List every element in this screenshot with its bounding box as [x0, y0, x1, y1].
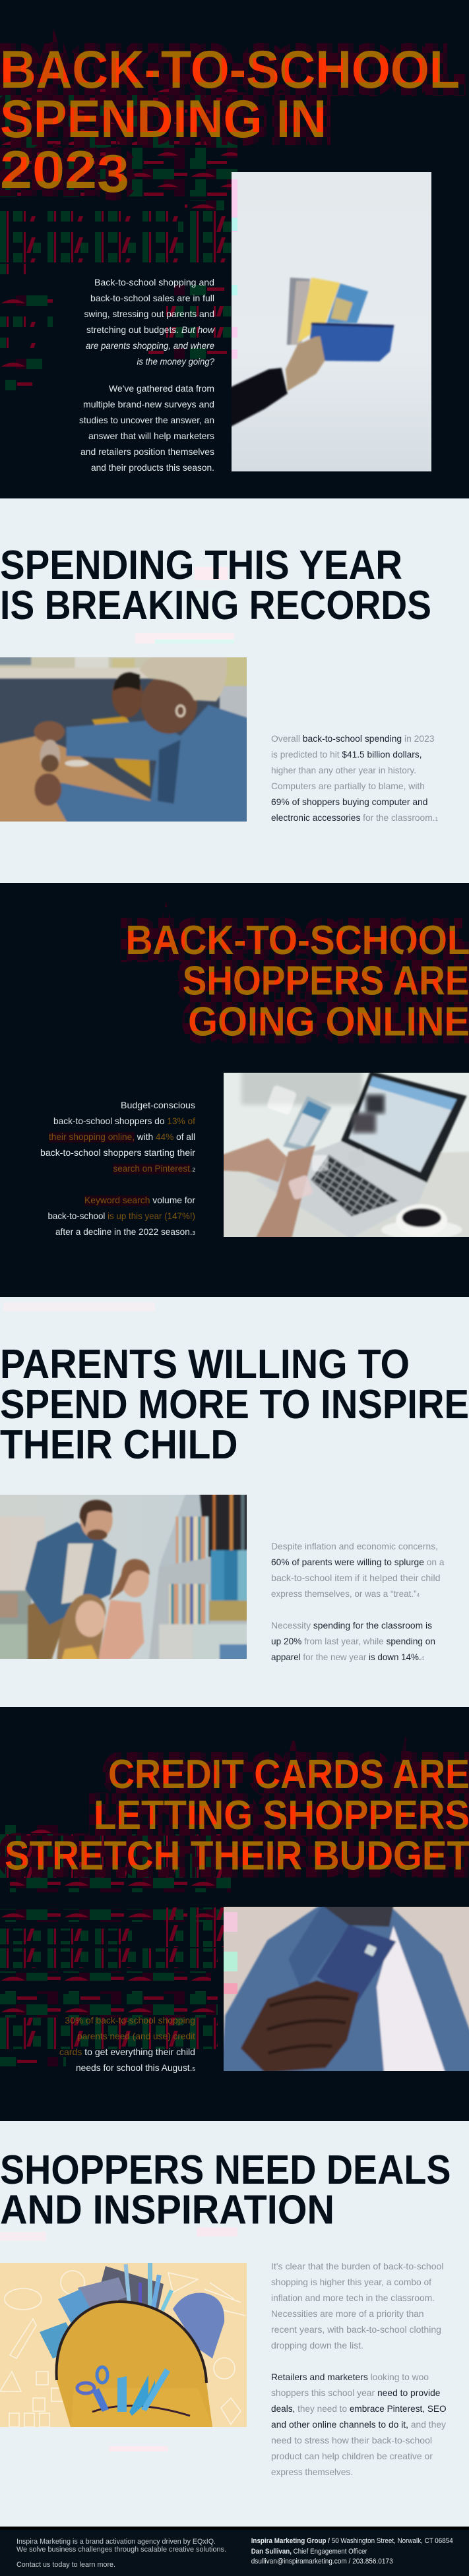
photo: family in school supplies aisle: [0, 1495, 247, 1659]
footer: about: We solve business challenges through scalable creative solutions.: [16, 2546, 226, 2554]
title: back-to-school spending in 2023: 202: [0, 140, 129, 204]
text block: online shopping stats: back-to-school shoppers do 13% of: [53, 1116, 195, 1126]
panel: going online: [0, 883, 469, 1297]
footer: contact: dsullivan@inspiramarketing.com / 203.856.0173: [251, 2558, 393, 2565]
heading: PARENTS WILLING TO: [0, 1342, 410, 1387]
photo: laptop and phone shopping: [224, 1073, 469, 1237]
text block: record spending: 69% of shoppers buying computer and: [271, 797, 427, 807]
text block: online shopping stats: back-to-school is up this year (147%!): [47, 1211, 195, 1221]
photo: backpack with supplies: [0, 2263, 247, 2427]
text block: intro: answer that will help marketers: [88, 431, 214, 441]
footer: [0, 2527, 469, 2576]
panel: credit cards: [0, 1707, 469, 2121]
text block: intro: stretching out budgets. But how: [86, 325, 215, 335]
heading: THEIR CHILD: [0, 1422, 237, 1468]
text block: splurging parents: apparel for the new year is down 14%.4: [271, 1652, 425, 1662]
text block: splurging parents: [271, 1542, 445, 1662]
photo: parent and child saving coins: [0, 657, 247, 822]
text block: online shopping stats: search on Pinterest.2: [113, 1164, 196, 1174]
text block: intro: and retailers position themselves: [80, 447, 214, 457]
panel: hero: [0, 0, 469, 498]
text block: record spending: Computers are partially to blame, with: [271, 781, 425, 791]
text block: splurging parents: 60% of parents were willing to splurge on a: [271, 1557, 445, 1567]
text block: takeaways: It's clear that the burden of back-to-school: [271, 2261, 443, 2271]
text block: takeaways: product can help children be creative or: [271, 2451, 433, 2461]
text block: intro: is the money going?: [137, 357, 214, 367]
text block: takeaways: recent years, with back-to-school clothing: [271, 2325, 441, 2335]
text block: intro: and their products this season.: [91, 463, 214, 473]
footer: contact: Dan Sullivan, Chief Engagement Officer: [251, 2548, 367, 2556]
text block: splurging parents: Necessity spending for the classroom is: [271, 1621, 432, 1631]
text block: intro: multiple brand-new surveys and: [83, 400, 214, 409]
text block: intro: We've gathered data from: [109, 384, 214, 394]
text block: credit card stat: parents need (and use) credit: [77, 2031, 195, 2041]
photo: hand holding a credit card: [224, 1907, 469, 2071]
text block: record spending: [271, 734, 439, 823]
text block: takeaways: shopping is higher this year, a combo of: [271, 2277, 431, 2287]
text block: credit card stat: [59, 2016, 196, 2073]
text block: online shopping stats: Keyword search volume for: [84, 1195, 195, 1205]
text block: intro: Back-to-school shopping and: [94, 278, 214, 287]
text block: online shopping stats: back-to-school shoppers starting their: [40, 1148, 195, 1158]
text block: online shopping stats: after a decline in the 2022 season.3: [55, 1227, 196, 1237]
text block: intro: swing, stressing out parents and: [84, 309, 214, 319]
text block: online shopping stats: [40, 1100, 196, 1237]
footer: about: [16, 2538, 226, 2569]
heading: AND INSPIRATION: [0, 2187, 334, 2232]
footer: contact: [251, 2537, 453, 2565]
text block: credit card stat: 30% of back-to-school shopping: [65, 2016, 195, 2025]
text block: takeaways: need to stress how their back-to-school: [271, 2436, 432, 2445]
text block: takeaways: Necessities are more of a priority than: [271, 2309, 424, 2319]
text block: splurging parents: Despite inflation and economic concerns,: [271, 1542, 438, 1551]
photo: hand holding school supplies: [232, 172, 431, 471]
text block: intro: back-to-school sales are in full: [90, 293, 214, 303]
panel: parents willing to spend: [0, 1297, 469, 1707]
text block: takeaways: dropping down the list.: [271, 2341, 363, 2351]
text block: takeaways: [271, 2261, 447, 2477]
text block: takeaways: and other online channels to do it, and they: [271, 2420, 446, 2430]
text block: intro: [79, 278, 215, 473]
text block: takeaways: shoppers this school year need to provide: [271, 2388, 441, 2398]
text block: record spending: electronic accessories for the classroom.1: [271, 813, 439, 823]
panel: deals and inspiration: [0, 2121, 469, 2527]
text block: takeaways: inflation and more tech in the classroom.: [271, 2293, 435, 2303]
text block: takeaways: Retailers and marketers looking to woo: [271, 2372, 429, 2382]
text block: credit card stat: cards to get everything their child: [59, 2047, 195, 2057]
text block: splurging parents: back-to-school item if it helped their child: [271, 1573, 441, 1583]
title: back-to-school spending in 2023: 3: [97, 144, 129, 204]
text block: online shopping stats: their shopping online, with 44% of all: [49, 1132, 195, 1142]
text block: splurging parents: express themselves, or was a “treat.”4: [271, 1589, 420, 1599]
text block: intro: are parents shopping, and where: [86, 341, 214, 351]
text block: takeaways: express themselves.: [271, 2467, 353, 2477]
text block: splurging parents: up 20% from last year, while spending on: [271, 1636, 435, 1646]
text block: online shopping stats: Budget-conscious: [121, 1100, 195, 1110]
panel: spending this year: [0, 498, 469, 883]
footer: contact: Inspira Marketing Group / 50 Washington Street, Norwalk, CT 06854: [251, 2537, 453, 2545]
text block: record spending: higher than any other year in history.: [271, 765, 416, 775]
footer: about: Contact us today to learn more.: [16, 2561, 115, 2569]
text block: intro: studies to uncover the answer, an: [79, 415, 214, 425]
title: back-to-school spending in 2023: SPENDING IN: [0, 90, 327, 149]
heading: SPENDING THIS YEAR: [0, 543, 402, 588]
text block: record spending: Overall back-to-school spending in 2023: [271, 734, 434, 744]
text block: takeaways: deals, they need to embrace Pinterest, SEO: [271, 2404, 447, 2414]
footer: about: Inspira Marketing is a brand activation agency driven by EQxIQ.: [16, 2538, 216, 2546]
text block: record spending: is predicted to hit $41.5 billion dollars,: [271, 750, 422, 760]
text block: credit card stat: needs for school this August. 5: [76, 2063, 196, 2073]
